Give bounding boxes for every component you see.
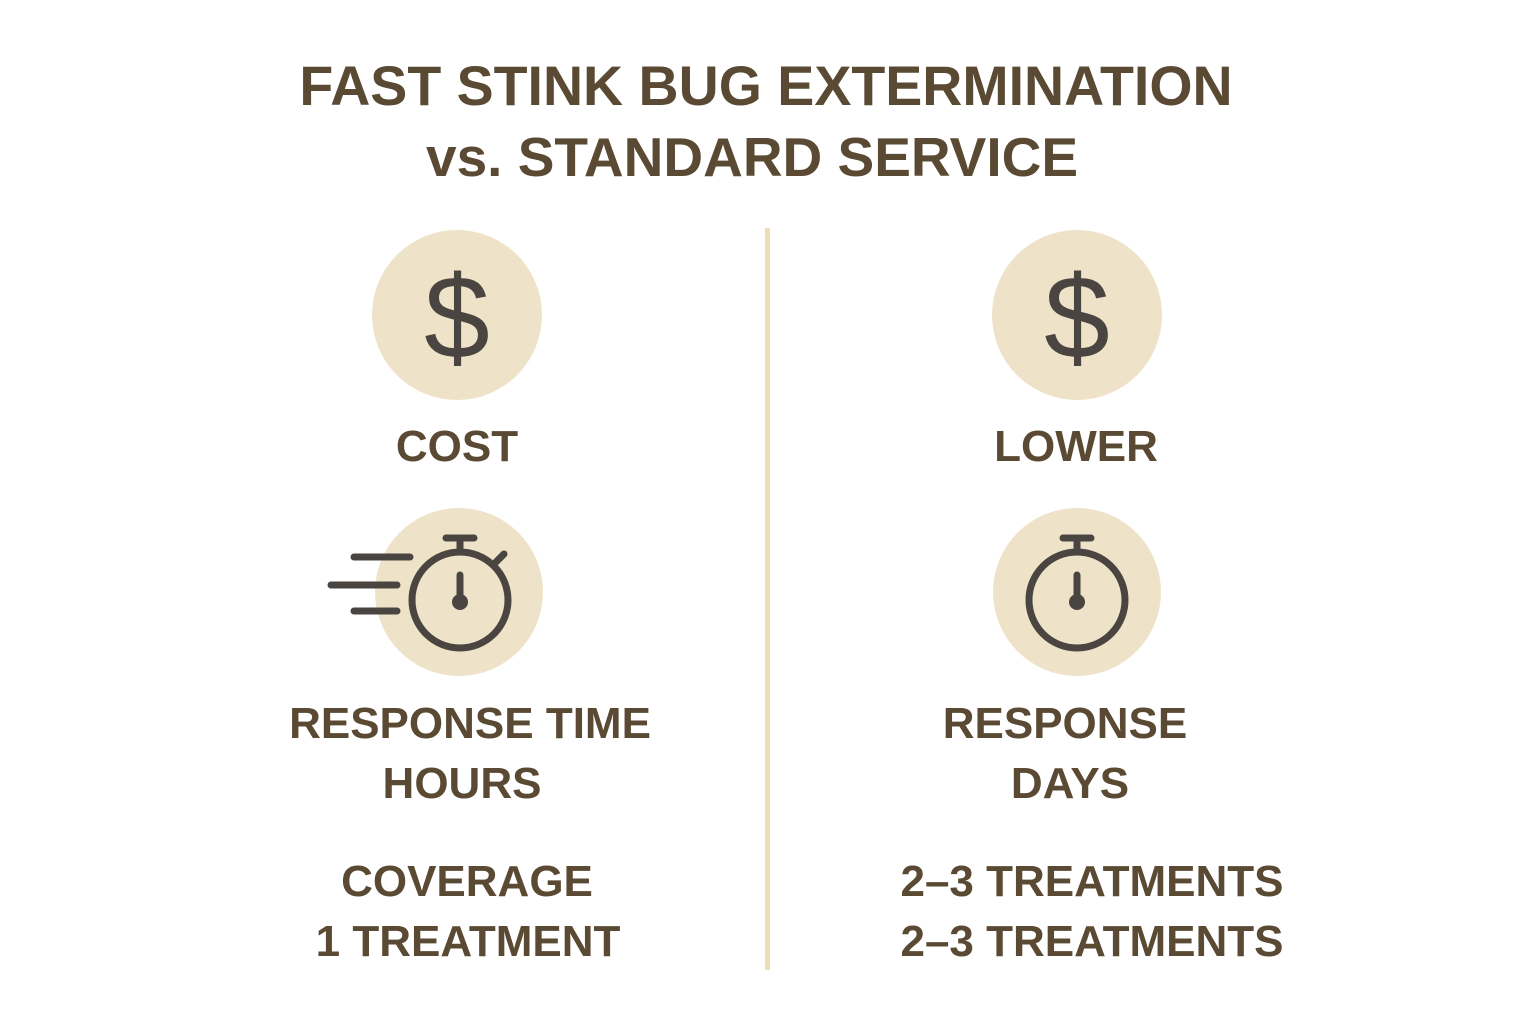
label: response time hours: RESPONSE TIME — [289, 699, 651, 748]
label: coverage — [316, 857, 620, 966]
label: coverage: COVERAGE — [341, 857, 593, 906]
label: cost: COST — [396, 422, 518, 471]
icon: stopwatch — [993, 508, 1161, 676]
icon: dollar right — [992, 230, 1162, 400]
icon: dollar left — [372, 230, 542, 400]
label: response days: RESPONSE — [943, 699, 1187, 748]
title: FAST STINK BUG EXTERMINATION — [299, 55, 1233, 117]
label: treatments: 2–3 TREATMENTS — [900, 917, 1284, 966]
label: treatments — [900, 857, 1284, 966]
panel: standard service — [900, 230, 1284, 966]
icon: dollar left: $ — [424, 252, 490, 384]
title — [299, 55, 1233, 188]
label: response time hours: HOURS — [383, 759, 541, 808]
label: treatments: 2–3 TREATMENTS — [900, 857, 1284, 906]
label: coverage: 1 TREATMENT — [316, 917, 620, 966]
label: lower: LOWER — [994, 422, 1158, 471]
title: vs. STANDARD SERVICE — [426, 126, 1078, 188]
icon: fast stopwatch — [331, 508, 543, 676]
label: response days: DAYS — [1011, 759, 1129, 808]
panel: fast service — [289, 230, 651, 966]
icon: dollar right: $ — [1044, 252, 1110, 384]
label: response time hours — [289, 699, 651, 808]
divider — [765, 228, 770, 970]
label: response days — [943, 699, 1187, 808]
